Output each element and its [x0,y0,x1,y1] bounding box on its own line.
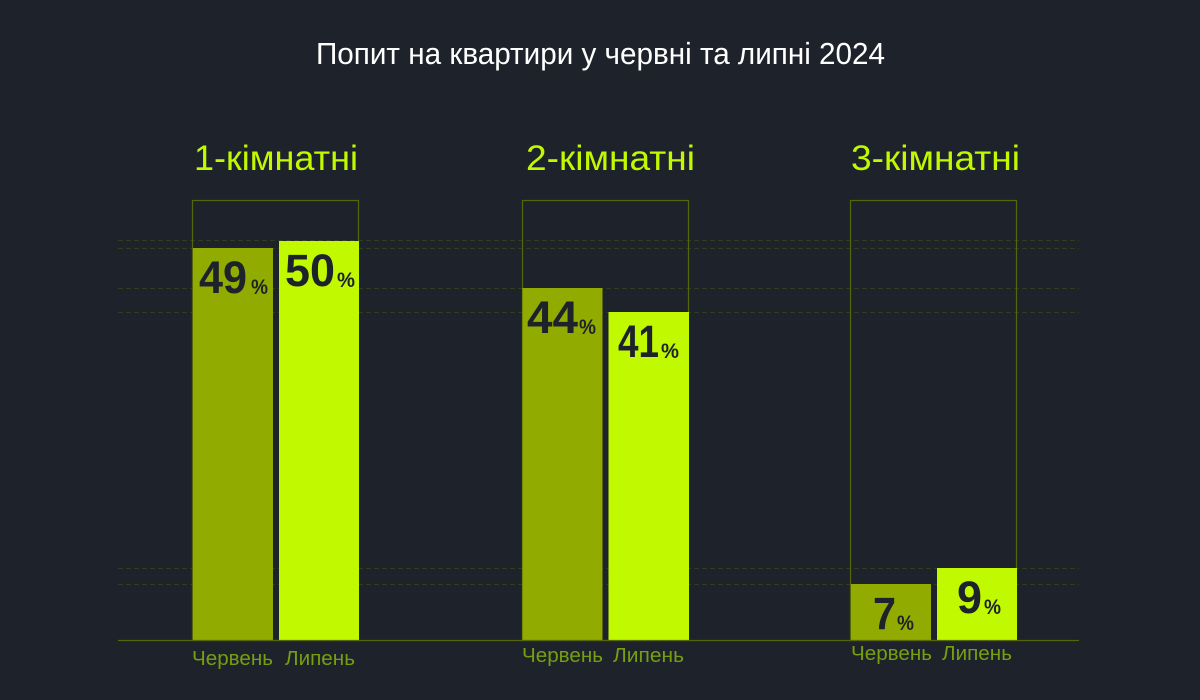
bar: June 49%: % [251,276,268,299]
bar: June 49% [193,248,273,640]
bar: July 41% [608,312,689,640]
bar: June 49%: 49 [199,252,247,303]
bar: July 41%: 41 [618,316,659,367]
bar: July 41%: % [661,340,679,363]
bar: June 7%: % [897,612,914,635]
bar: June 44% [522,288,602,640]
label: June: Червень [192,648,273,670]
bar: June 7% [851,584,931,640]
label: June: Червень [851,643,932,665]
heading: 2-room: 2-кімнатні [526,139,695,178]
bar: July 50%: 50 [285,245,335,296]
bar: July 9%: % [984,596,1001,619]
bar: July 9%: 9 [957,572,982,623]
bar: June 44%: 44 [527,292,578,343]
panel: 3-room apartments [850,139,1020,665]
bar: June 44%: % [579,316,596,339]
label: July: Липень [285,648,355,670]
bar: July 50% [279,241,359,641]
label: July: Липень [942,643,1012,665]
bar: July 50%: % [337,269,355,292]
panel: 2-room apartments [522,139,695,667]
heading: 3-room: 3-кімнатні [851,139,1020,178]
bar: June 7%: 7 [873,588,896,639]
heading: 1-room: 1-кімнатні [194,139,358,178]
bar: July 9% [937,568,1017,640]
frame: 2-room scale [522,200,688,640]
chart baseline [118,640,1079,642]
title: Попит на квартири у червні та липні 2024 [316,36,885,71]
frame: 1-room scale [192,200,358,640]
panel: 1-room apartments [192,139,359,670]
frame: 3-room scale [850,200,1016,640]
label: June: Червень [522,645,603,667]
label: July: Липень [613,645,684,667]
